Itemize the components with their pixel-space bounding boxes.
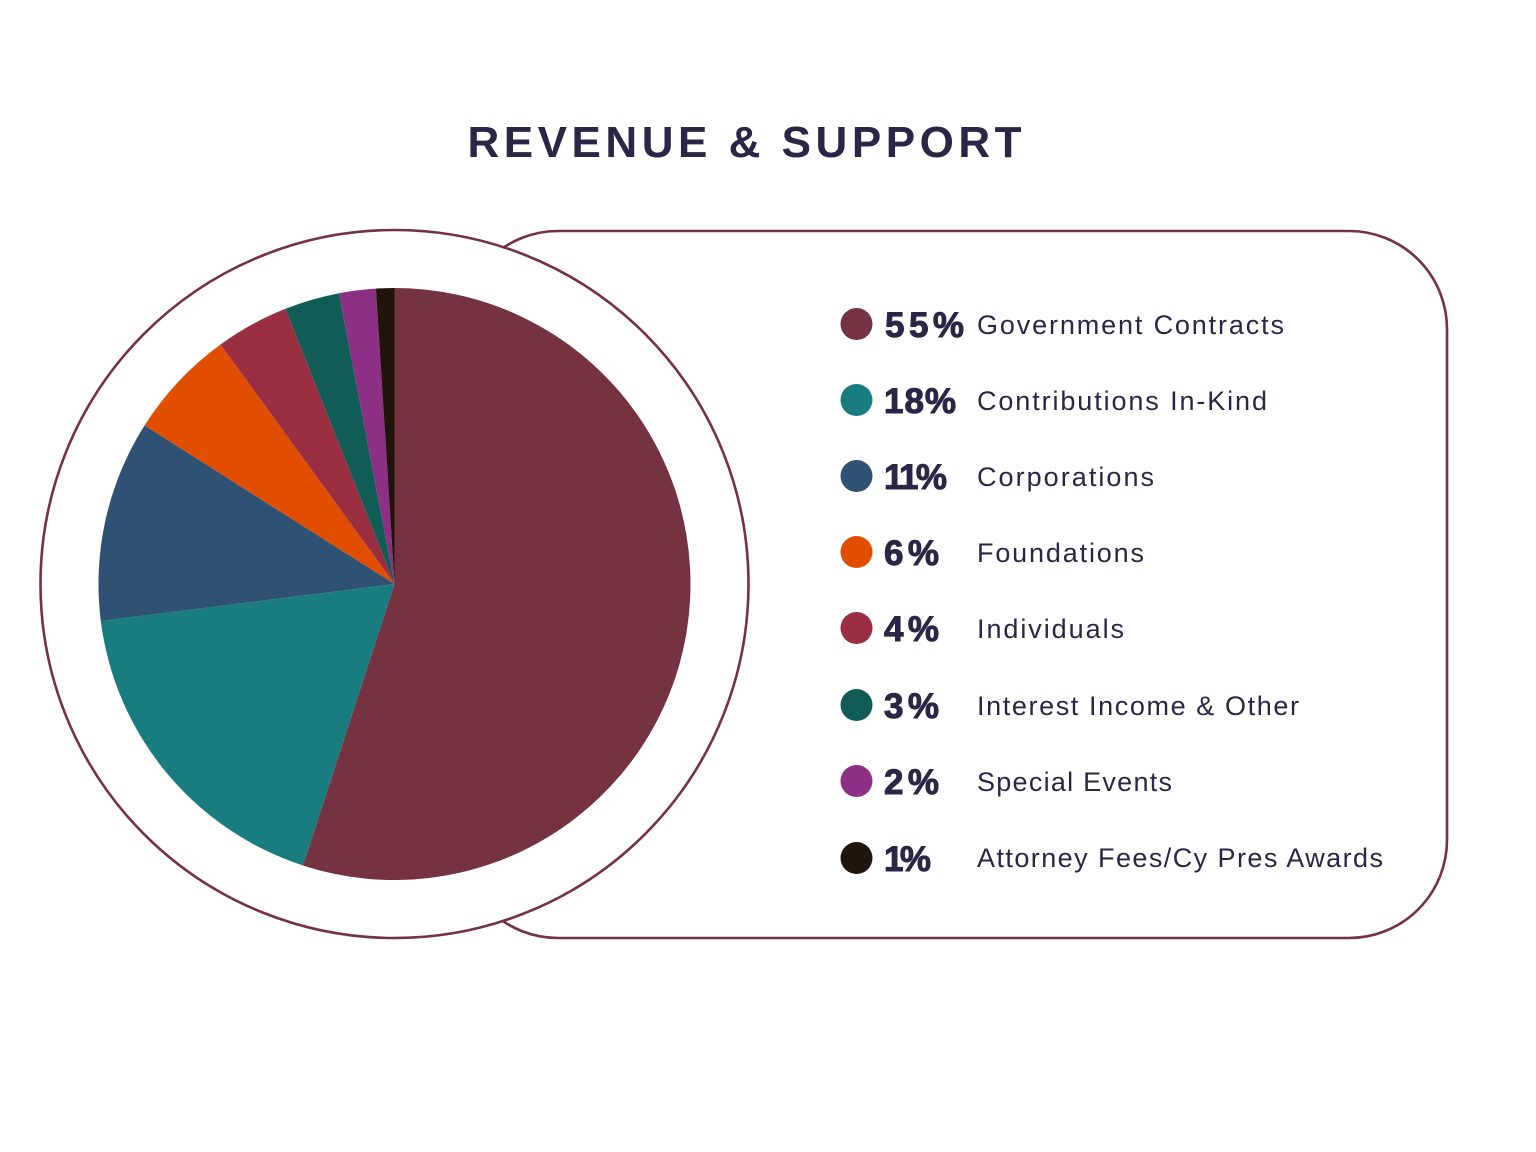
slice: interest income 3% xyxy=(286,293,394,584)
panel: pie outer ring xyxy=(40,230,748,938)
legend row: foundations: 6% xyxy=(884,534,939,573)
slice: attorney fees 1% xyxy=(376,288,394,584)
legend row: individuals: Individuals xyxy=(977,614,1124,644)
legend row: attorney fees / cy pres awards: 1% xyxy=(884,840,931,879)
slice: special events 2% xyxy=(339,289,394,584)
legend row: government contracts: Government Contracts xyxy=(977,310,1284,340)
legend row: foundations xyxy=(840,534,1144,573)
legend row: contributions in-kind: 18% xyxy=(884,382,956,421)
legend row: special events xyxy=(840,763,1172,802)
legend row: government contracts xyxy=(840,306,1284,345)
legend row: attorney fees / cy pres awards: Attorney Fees/Cy Pres Awards xyxy=(977,843,1383,873)
legend row: individuals xyxy=(840,610,1124,649)
legend row: corporations: 11% xyxy=(884,458,947,497)
legend row: special events: Special Events xyxy=(977,767,1172,797)
legend row: corporations: Corporations xyxy=(977,462,1154,492)
legend row: interest income & other: 3% xyxy=(884,687,939,726)
pie chart xyxy=(98,288,691,880)
panel: legend card xyxy=(460,231,1447,938)
legend row: individuals: 4% xyxy=(884,610,939,649)
legend row: special events: 2% xyxy=(884,763,939,802)
legend row: attorney fees / cy pres awards xyxy=(840,840,1383,879)
legend row: interest income & other xyxy=(840,687,1299,726)
slice: government contracts 55% xyxy=(303,288,691,880)
legend row: government contracts: 55% xyxy=(885,306,964,345)
title: REVENUE & SUPPORT xyxy=(468,118,1022,167)
legend row: interest income & other: Interest Income & Other xyxy=(977,691,1299,721)
slice: individuals 4% xyxy=(220,309,394,584)
legend row: corporations xyxy=(840,458,1154,497)
slice: corporations 11% xyxy=(98,425,394,621)
slice: contributions in-kind 18% xyxy=(101,584,395,866)
legend row: contributions in-kind: Contributions In-Kind xyxy=(977,386,1267,416)
legend row: foundations: Foundations xyxy=(977,538,1144,568)
slice: foundations 6% xyxy=(145,344,394,584)
legend row: contributions in-kind xyxy=(840,382,1267,421)
